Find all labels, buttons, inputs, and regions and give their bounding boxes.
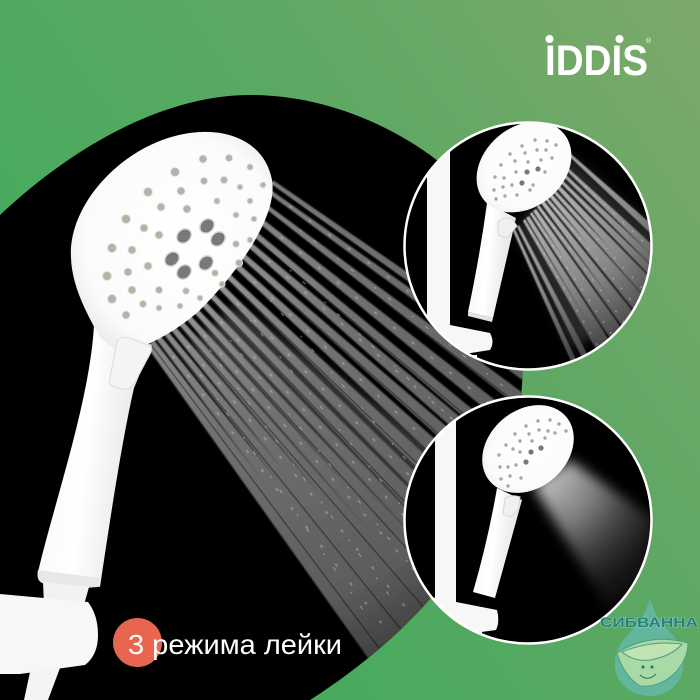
- rail and bracket: [427, 152, 492, 358]
- spray beams: [516, 155, 660, 350]
- main shower head: [38, 132, 273, 588]
- IDDIS logo: ®: [646, 37, 652, 45]
- collar: [38, 570, 100, 588]
- rail and bracket: [434, 421, 498, 634]
- small shower head: [468, 124, 572, 322]
- circle: spray mode: [403, 121, 653, 371]
- handle: [38, 325, 152, 587]
- caption: 3 modes: [113, 618, 342, 667]
- centre jets: [162, 216, 228, 282]
- caption: 3 modes: 3 режима лейки: [128, 629, 342, 660]
- sibvanna wordmark: СИБВАННА: [600, 614, 698, 630]
- tub face: [640, 666, 656, 678]
- small shower head: [473, 405, 574, 598]
- red circle badge: [113, 618, 162, 667]
- head body: [71, 132, 273, 350]
- nozzles: [102, 154, 266, 319]
- holder clamp: [0, 582, 98, 700]
- tub: [617, 639, 688, 686]
- circle: mist mode: [404, 387, 655, 644]
- mist cone: [533, 460, 655, 608]
- watermark: Sibvanna: [600, 597, 698, 696]
- IDDIS logo: IDDIS: [545, 37, 648, 85]
- water spray: [150, 180, 523, 658]
- mode button: [109, 337, 152, 389]
- drop: [615, 597, 684, 696]
- black blob panel with main shower: [0, 95, 576, 700]
